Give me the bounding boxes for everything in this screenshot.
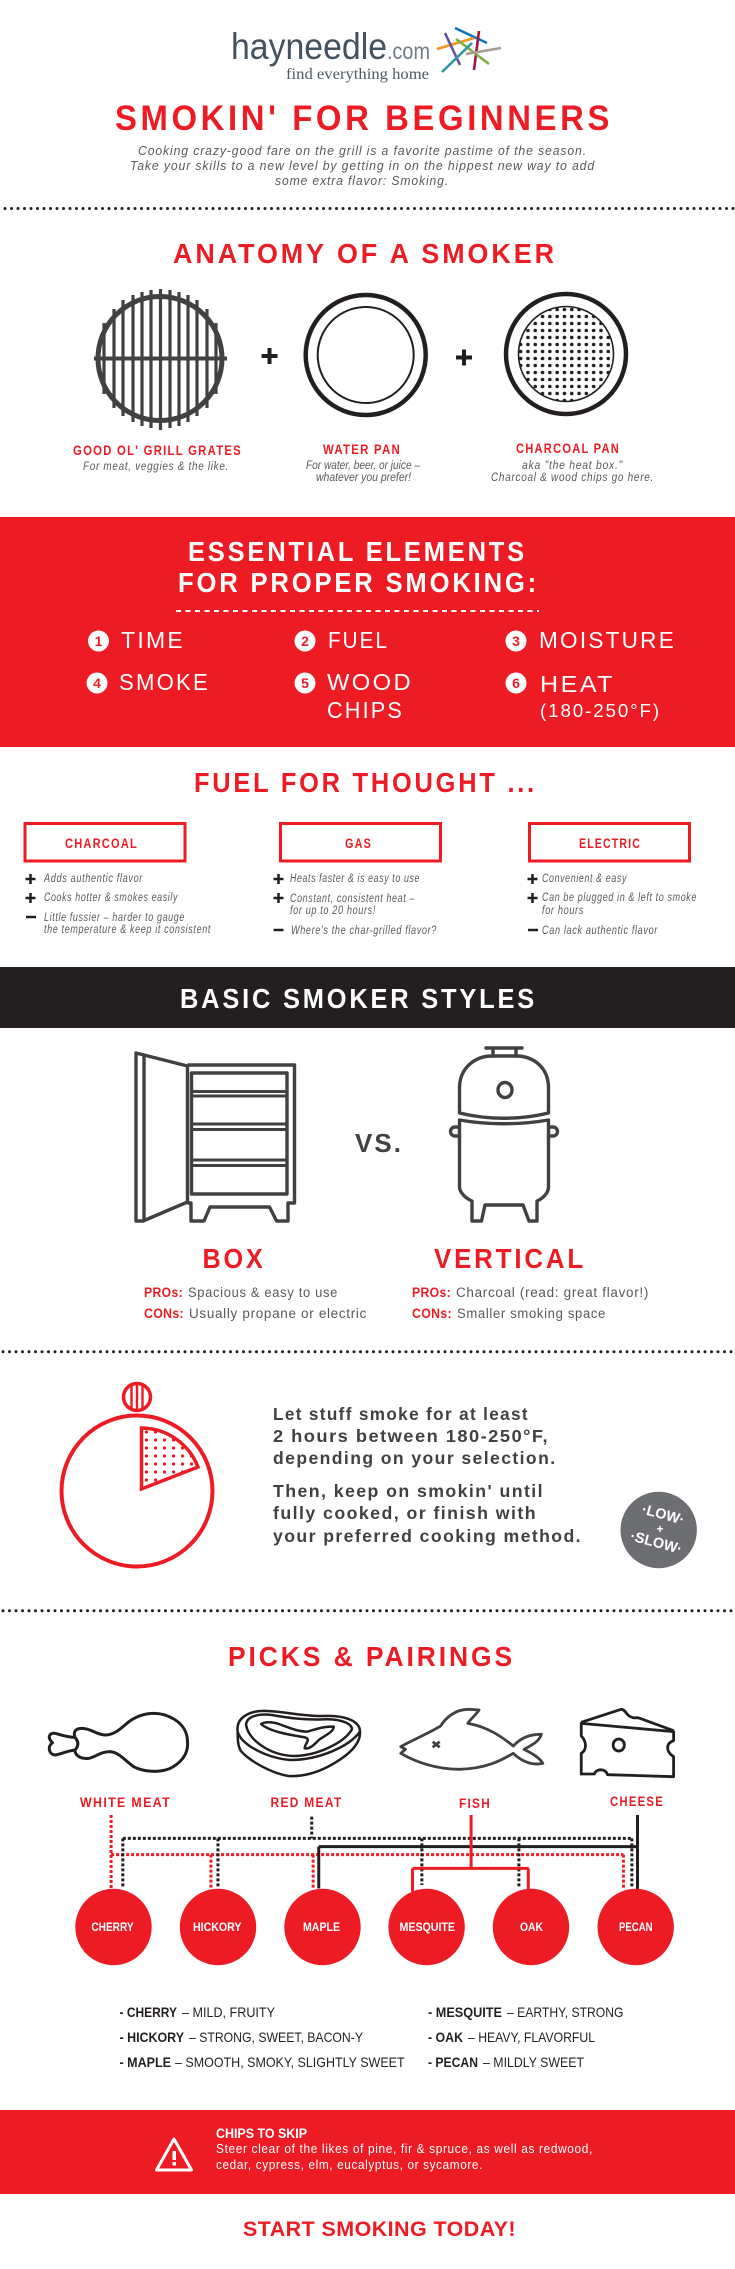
connectors: white meat [111,1815,623,1888]
label: water pan: WATER PAN [323,442,401,457]
label: water pan: whatever you prefer! [316,472,412,484]
style: vertical: PROs: [412,1285,451,1300]
item: time: 1 [95,633,103,649]
intro text: Take your skills to a new level by getting in on the hippest new way to add [130,158,595,173]
wood: cherry: CHERRY [91,1920,134,1934]
wood: hickory: HICKORY [193,1920,242,1934]
intro text: Cooking crazy-good fare on the grill is a favorite pastime of the season. [138,143,587,158]
column: gas: Heats faster & is easy to use [290,873,420,885]
icon: vertical smoker [450,1048,558,1221]
wood: hickory [180,1889,256,1965]
icon: grill grates [94,289,227,430]
badge: low + slow: ·LOW· [640,1502,686,1528]
labels: food categories: WHITE MEAT [80,1795,171,1810]
list: wood flavors right: - OAK [428,2029,463,2045]
wood: pecan: PECAN [619,1920,653,1934]
label: grill grates [73,443,242,473]
column: electric: Convenient & easy [542,873,627,885]
style: box: Spacious & easy to use [188,1285,338,1300]
icon: fish [401,1709,543,1769]
label: charcoal pan: Charcoal & wood chips go here. [491,472,654,484]
heading: essential elements: ESSENTIAL ELEMENTS [188,536,527,567]
title: SMOKIN' FOR BEGINNERS [115,99,613,138]
item: fuel: FUEL [328,627,389,653]
connectors: cheese [319,1815,638,1890]
item: fuel [294,627,389,653]
list: wood flavors left: – STRONG, SWEET, BACON-Y [189,2029,364,2045]
list: wood flavors right: – HEAVY, FLAVORFUL [468,2029,595,2045]
style: box: CONs: [144,1306,184,1321]
list: wood flavors right: – EARTHY, STRONG [507,2004,624,2020]
column: electric [528,824,697,937]
style: vertical: CONs: [412,1306,452,1321]
heading: picks and pairings: PICKS & PAIRINGS [228,1641,515,1672]
wood: pecan [598,1889,674,1965]
column: charcoal: Cooks hotter & smokes easily [44,892,178,904]
item: heat [506,671,661,721]
connectors: red meat [123,1817,633,1888]
style: box: Usually propane or electric [189,1306,367,1321]
list: wood flavors left: – MILD, FRUITY [182,2004,276,2020]
icon: water pan [306,295,426,415]
label: water pan: For water, beer, or juice – [306,460,421,472]
panel: chips to skip [0,2110,735,2194]
column: gas: Where's the char-grilled flavor? [291,925,437,937]
column: charcoal [25,824,211,936]
wood: maple [284,1889,361,1965]
wood: cherry [75,1889,152,1965]
text: chips to skip: CHIPS TO SKIP [216,2126,307,2141]
icon: drumstick [49,1713,188,1771]
labels: food categories: FISH [459,1796,491,1811]
item: smoke: SMOKE [119,669,210,695]
icon: plus [262,348,278,364]
column: electric: Can lack authentic flavor [542,925,658,937]
labels: food categories: CHEESE [610,1794,664,1809]
style: box [144,1243,367,1321]
list: wood flavors left: - MAPLE [120,2054,171,2070]
chart: pairing connectors [111,1815,638,1892]
list: wood flavors right: - PECAN [428,2054,478,2070]
column: charcoal: the temperature & keep it consistent [44,924,211,936]
icon: box smoker [136,1053,294,1221]
intro text [130,143,595,188]
logo: hayneedle.com: .com [387,38,430,64]
icon: charcoal pan [506,294,626,414]
heading: essential elements: FOR PROPER SMOKING: [178,567,539,598]
style: vertical: VERTICAL [434,1243,586,1274]
panel: basic smoker styles heading [0,967,735,1028]
text: chips to skip: cedar, cypress, elm, eucalyptus, or sycamore. [216,2157,483,2172]
list: wood flavors left: - CHERRY [120,2004,178,2020]
column: charcoal: Adds authentic flavor [43,873,143,885]
label: water pan [306,442,421,484]
logo: hayneedle.com: find everything home [286,66,429,83]
column: gas: Constant, consistent heat – [290,893,415,905]
labels: food categories: RED MEAT [270,1795,342,1810]
icon: plus [456,350,472,366]
column: gas [274,824,440,937]
item: time: TIME [121,627,185,653]
text: smoke time instructions: fully cooked, or finish with [273,1503,537,1523]
logo: hayneedle.com: hayneedle [231,26,387,67]
badge: low + slow: ·SLOW· [628,1529,684,1558]
item: smoke: 4 [93,675,101,691]
panel: essential elements [0,517,735,747]
column: gas: GAS [345,836,372,851]
list: wood flavors left: – SMOOTH, SMOKY, SLIGHTLY SWEET [175,2054,405,2070]
text: smoke time instructions [273,1404,582,1546]
column: electric: for hours [542,905,584,917]
list: wood flavors right: - MESQUITE [428,2004,502,2020]
text: versus: VS. [355,1128,403,1158]
item: wood chips: CHIPS [327,697,404,723]
style: box: BOX [202,1243,266,1274]
text: chips to skip [216,2126,593,2172]
text: smoke time instructions: 2 hours between 180-250°F, [273,1426,549,1446]
intro text: some extra flavor: Smoking. [275,173,449,188]
labels: food categories [80,1794,664,1811]
item: wood chips: 5 [301,675,309,691]
item: heat: 6 [512,675,520,691]
icon: cheese [581,1709,674,1777]
item: fuel: 2 [301,633,309,649]
item: heat: HEAT [540,671,615,697]
list: wood flavors right: – MILDLY SWEET [483,2054,584,2070]
heading: fuel for thought: FUEL FOR THOUGHT ... [194,767,537,798]
wood: oak: OAK [520,1920,543,1934]
panel: basic smoker styles heading: BASIC SMOKER STYLES [180,983,537,1014]
column: gas: for up to 20 hours! [290,905,376,917]
column: electric: ELECTRIC [579,836,641,851]
connectors: fish [412,1815,529,1892]
item: wood chips: WOOD [327,669,413,695]
list: wood flavors right [428,2004,624,2070]
label: charcoal pan [491,441,654,484]
heading: essential elements [178,536,539,598]
text: smoke time instructions: depending on your selection. [273,1448,556,1468]
item: moisture: MOISTURE [539,627,676,653]
item: time [88,627,185,653]
text: chips to skip: Steer clear of the likes of pine, fir & spruce, as well as redwood, [216,2141,593,2156]
footer call to action: START SMOKING TODAY! [243,2217,516,2241]
wood: maple: MAPLE [303,1920,340,1934]
label: charcoal pan: CHARCOAL PAN [516,441,620,456]
icon: steak [237,1711,360,1776]
badge: low + slow [620,1492,697,1568]
style: vertical [412,1243,649,1321]
list: wood flavors left: - HICKORY [120,2029,185,2045]
style: box: PROs: [144,1285,183,1300]
badge: low + slow: + [656,1522,664,1536]
text: smoke time instructions: Then, keep on smokin' until [273,1481,544,1501]
wood: mesquite: MESQUITE [400,1920,455,1934]
list: wood flavors left [120,2004,405,2070]
item: wood chips [294,669,413,723]
column: charcoal: CHARCOAL [65,836,138,851]
item: heat: (180-250°F) [540,701,661,721]
label: grill grates: GOOD OL' GRILL GRATES [73,443,242,458]
icon: warning triangle [156,2139,192,2170]
item: moisture: 3 [512,633,520,649]
wood: oak [493,1889,569,1965]
icon: timer [62,1384,212,1566]
label: charcoal pan: aka "the heat box." [522,460,623,472]
wood: mesquite [388,1889,465,1965]
text: smoke time instructions: your preferred cooking method. [273,1526,582,1546]
text: smoke time instructions: Let stuff smoke for at least [273,1404,529,1424]
heading: anatomy of a smoker: ANATOMY OF A SMOKER [173,238,557,269]
label: grill grates: For meat, veggies & the like. [83,461,229,473]
logo: hayneedle.com [231,26,501,83]
column: charcoal: Little fussier – harder to gauge [44,912,185,924]
style: vertical: Charcoal (read: great flavor!) [456,1285,649,1300]
style: vertical: Smaller smoking space [457,1306,606,1321]
